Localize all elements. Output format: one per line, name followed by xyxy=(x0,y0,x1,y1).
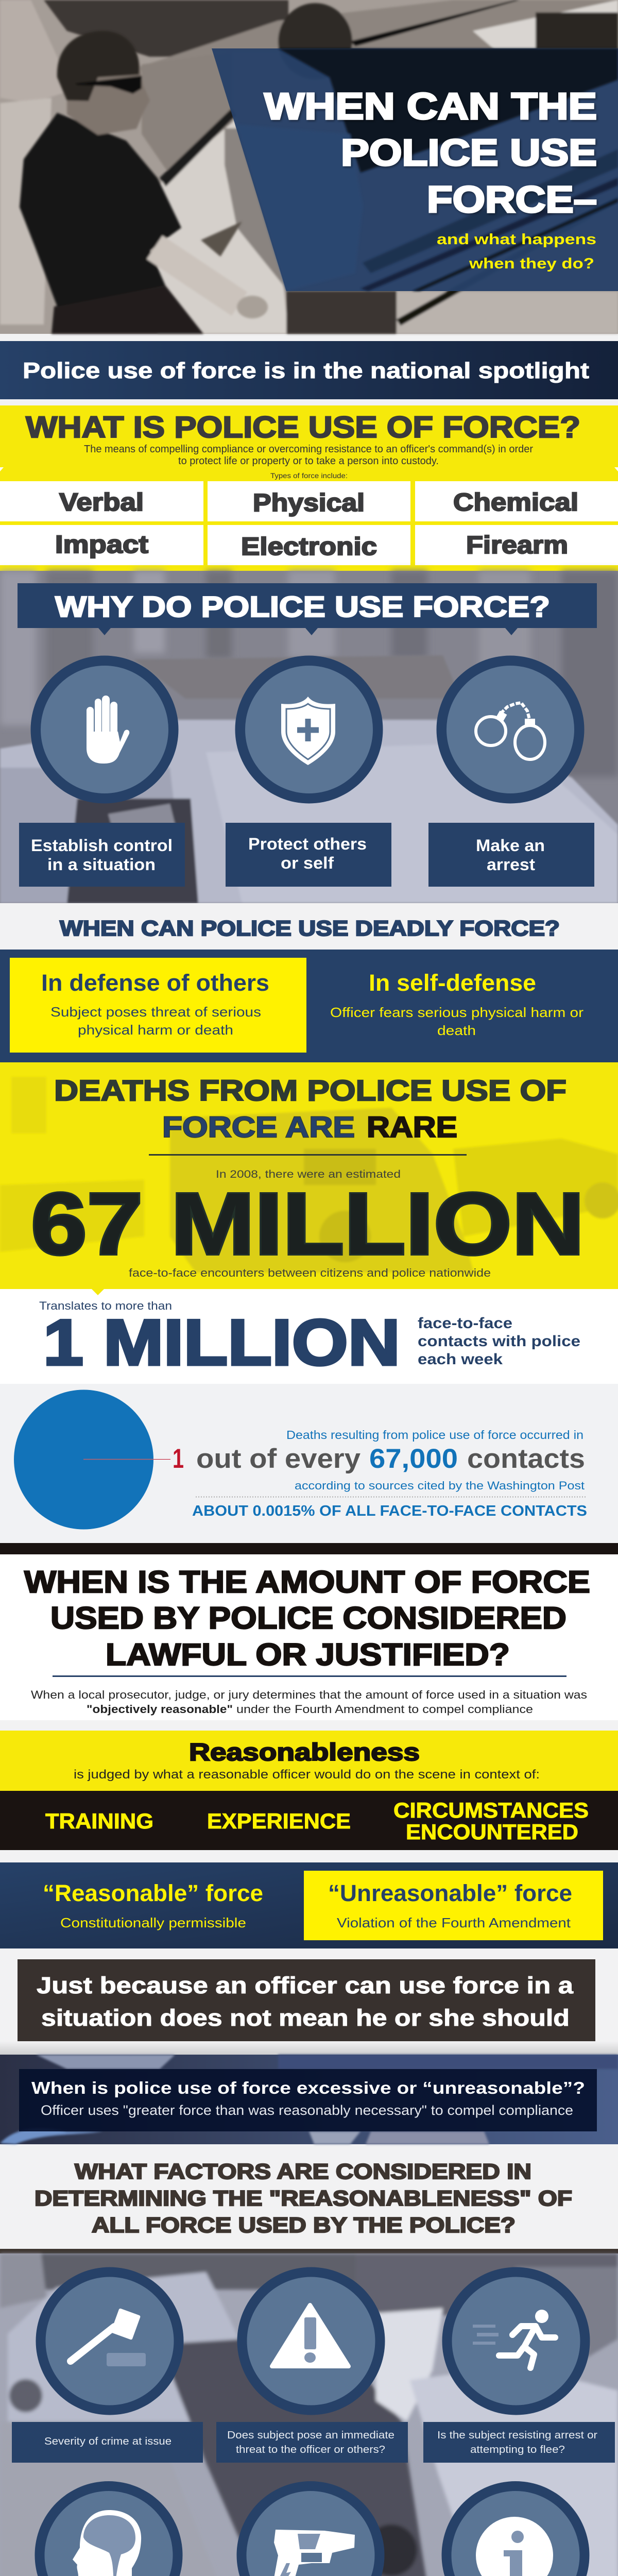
context band: EXPERIENCE xyxy=(207,1809,351,1833)
heading: what factors are considered: ALL FORCE USED BY THE POLICE? xyxy=(92,2213,516,2237)
force type: electronic: Electronic xyxy=(241,533,377,561)
explanation: is judged by what a reasonable officer would do on the scene in context of: xyxy=(74,1768,540,1782)
force type: verbal: Verbal xyxy=(59,489,144,516)
background photo: hands raised xyxy=(0,2055,618,2144)
big number: 67 million: 67 MILLION xyxy=(31,1175,585,1273)
explanation: under the Fourth Amendment to compel compliance xyxy=(236,1703,533,1716)
unreasonable force: Violation of the Fourth Amendment xyxy=(337,1915,571,1930)
explanation: "objectively reasonable" xyxy=(87,1703,233,1716)
reason: protect others: Protect others xyxy=(248,835,367,853)
panel: 1 out of every 67,000 contacts xyxy=(0,1384,618,1543)
context band: ENCOUNTERED xyxy=(406,1820,578,1844)
factor label: immediate threat: threat to the officer or others? xyxy=(236,2444,385,2455)
caption: face-to-face xyxy=(418,1315,512,1332)
icon: stop hand xyxy=(31,655,178,804)
heading: what factors are considered: WHAT FACTORS ARE CONSIDERED IN xyxy=(75,2159,531,2183)
card: defense of others xyxy=(10,958,306,1053)
caption: contacts with police xyxy=(418,1333,580,1350)
heading xyxy=(54,1074,566,1144)
types intro: Types of force include: xyxy=(270,471,348,480)
caption xyxy=(418,1315,580,1368)
reason: establish control: in a situation xyxy=(47,855,156,874)
context band xyxy=(0,1791,618,1850)
hero panel xyxy=(0,0,618,334)
factor label: immediate threat: Does subject pose an immediate xyxy=(227,2430,394,2441)
spotlight banner xyxy=(0,341,618,399)
reasonable force: “Reasonable” force xyxy=(43,1880,263,1906)
reason: make an arrest: arrest xyxy=(487,855,535,874)
card: self-defense: death xyxy=(437,1023,476,1038)
heading: WHEN IS THE AMOUNT OF FORCE xyxy=(24,1565,590,1599)
force type: impact: Impact xyxy=(55,531,148,558)
stat text: 67,000 xyxy=(369,1444,458,1474)
main title: WHEN CAN THE xyxy=(264,86,597,127)
stat text: 1 xyxy=(173,1444,184,1474)
panel: excessive force xyxy=(0,2055,618,2144)
explanation xyxy=(31,1688,587,1716)
heading: what factors are considered: DETERMINING THE "REASONABLENESS" OF xyxy=(35,2186,572,2210)
panel: reasonable vs unreasonable force xyxy=(0,1862,618,1948)
factor icon: information xyxy=(442,2481,589,2576)
main title xyxy=(264,86,597,221)
big number: 1 million: 1 MILLION xyxy=(43,1306,400,1379)
heading: when can police use deadly force: WHEN CAN POLICE USE DEADLY FORCE? xyxy=(60,916,560,940)
reason: establish control: Establish control xyxy=(31,836,173,855)
heading: DEATHS FROM POLICE USE OF xyxy=(54,1074,566,1107)
context band: CIRCUMSTANCES xyxy=(393,1798,589,1822)
background photo: police car xyxy=(0,571,618,903)
card: self-defense: In self-defense xyxy=(369,970,536,996)
panel: reasonableness xyxy=(0,1731,618,1850)
heading xyxy=(24,1565,590,1672)
circle chart xyxy=(14,1390,170,1529)
intro text: Translates to more than xyxy=(39,1299,172,1312)
force type: verbal xyxy=(0,481,203,521)
unreasonable force xyxy=(304,1871,603,1940)
stat text xyxy=(173,1428,587,1519)
panel: one million per week xyxy=(0,1289,618,1384)
black divider band xyxy=(0,1543,618,1554)
reason: make an arrest xyxy=(428,823,594,887)
main title: POLICE USE xyxy=(341,132,597,174)
factor label: resisting arrest xyxy=(423,2422,615,2463)
factor icon: warning triangle xyxy=(237,2267,385,2415)
subtitle: when they do? xyxy=(469,256,594,272)
callout: can vs should: Just because an officer can use force in a xyxy=(37,1972,574,1998)
factor label: resisting arrest: attempting to flee? xyxy=(470,2444,565,2455)
caption: face-to-face encounters between citizens and police nationwide xyxy=(129,1266,491,1279)
subtitle: and what happens xyxy=(437,231,596,248)
reason: protect others xyxy=(226,823,391,887)
heading: RARE xyxy=(367,1111,457,1144)
card: self-defense xyxy=(330,970,583,1038)
officer xyxy=(20,31,268,334)
heading banner with pointers xyxy=(18,583,597,635)
definition: The means of compelling compliance or overcoming resistance to an officer's command(s) in order xyxy=(84,444,533,455)
icon: handcuffs xyxy=(437,655,584,804)
panel: deaths are rare xyxy=(0,1062,618,1289)
spotlight banner: Police use of force is in the national spotlight xyxy=(23,358,589,383)
heading banner with pointers: WHY DO POLICE USE FORCE? xyxy=(55,590,550,623)
factor label: severity of crime xyxy=(12,2422,203,2463)
heading: FORCE ARE xyxy=(162,1111,355,1144)
yellow photo background xyxy=(0,1062,618,1289)
heading: when can police use deadly force xyxy=(0,903,618,950)
factor label: immediate threat xyxy=(216,2422,408,2463)
hero photo: officer arresting a subject xyxy=(0,0,618,334)
blue title panel xyxy=(212,48,618,291)
stat text: Deaths resulting from police use of force occurred in xyxy=(286,1428,583,1442)
unreasonable force: “Unreasonable” force xyxy=(328,1880,572,1906)
force type: chemical: Chemical xyxy=(453,489,578,516)
callout: can vs should: situation does not mean he or she should xyxy=(41,2005,570,2031)
panel: factors grid xyxy=(0,2249,618,2576)
reasonable force xyxy=(43,1880,263,1930)
intro text: In 2008, there were an estimated xyxy=(216,1168,401,1180)
definition xyxy=(84,444,533,467)
dark text box xyxy=(19,2069,597,2131)
question: When is police use of force excessive or “unreasonable”? xyxy=(31,2078,585,2097)
stat text: out of every xyxy=(196,1444,361,1474)
factor icon: stun gun xyxy=(237,2481,384,2576)
main title: FORCE– xyxy=(427,179,597,221)
factor label: severity of crime: Severity of crime at issue xyxy=(44,2436,171,2447)
definition: to protect life or property or to take a person into custody. xyxy=(178,455,439,467)
heading: USED BY POLICE CONSIDERED xyxy=(50,1601,566,1635)
force type: chemical xyxy=(415,481,618,521)
factor icon: head with brain xyxy=(35,2481,182,2576)
heading: what factors are considered xyxy=(35,2159,572,2237)
force type: electronic xyxy=(208,525,410,565)
heading: WHAT IS POLICE USE OF FORCE? xyxy=(26,411,580,444)
force type: firearm xyxy=(415,525,618,565)
force type: impact xyxy=(0,525,203,565)
force type: physical xyxy=(208,481,410,521)
force type: physical: Physical xyxy=(253,489,365,517)
force type: firearm: Firearm xyxy=(466,532,568,559)
card: defense of others: Subject poses threat of serious xyxy=(50,1004,261,1020)
subtitle xyxy=(437,231,596,272)
stat text: ABOUT 0.0015% OF ALL FACE-TO-FACE CONTACTS xyxy=(192,1503,587,1519)
answer: Officer uses "greater force than was reasonably necessary" to compel compliance xyxy=(41,2103,573,2118)
panel: deadly force conditions xyxy=(0,950,618,1062)
factor icon: running figure xyxy=(442,2267,590,2415)
stat text: contacts xyxy=(467,1444,585,1474)
card: defense of others: In defense of others xyxy=(41,970,269,996)
pointer xyxy=(92,1289,104,1295)
panel: lawful or justified xyxy=(0,1554,618,1720)
callout: can vs should xyxy=(0,1959,618,2055)
reason: make an arrest: Make an xyxy=(476,836,545,855)
reasonable force: Constitutionally permissible xyxy=(60,1915,246,1930)
card: defense of others: physical harm or death xyxy=(78,1022,233,1038)
reason: establish control xyxy=(19,823,185,887)
panel: why do police use force xyxy=(0,571,618,903)
card: self-defense: Officer fears serious physical harm or xyxy=(330,1005,583,1020)
explanation: When a local prosecutor, judge, or jury determines that the amount of force used in a situation was xyxy=(31,1688,587,1701)
context band: TRAINING xyxy=(45,1809,153,1833)
heading: LAWFUL OR JUSTIFIED? xyxy=(106,1637,510,1672)
caption: each week xyxy=(418,1351,503,1368)
panel: what is police use of force xyxy=(0,405,618,571)
factor icon: gavel xyxy=(36,2267,183,2415)
stat text: according to sources cited by the Washington Post xyxy=(295,1479,585,1492)
background photo: officer searching suspect at car xyxy=(0,2249,618,2576)
factor label: resisting arrest: Is the subject resisting arrest or xyxy=(437,2430,597,2441)
icon: shield with cross xyxy=(235,655,383,804)
heading: Reasonableness xyxy=(189,1738,420,1766)
reason: protect others: or self xyxy=(281,854,334,872)
